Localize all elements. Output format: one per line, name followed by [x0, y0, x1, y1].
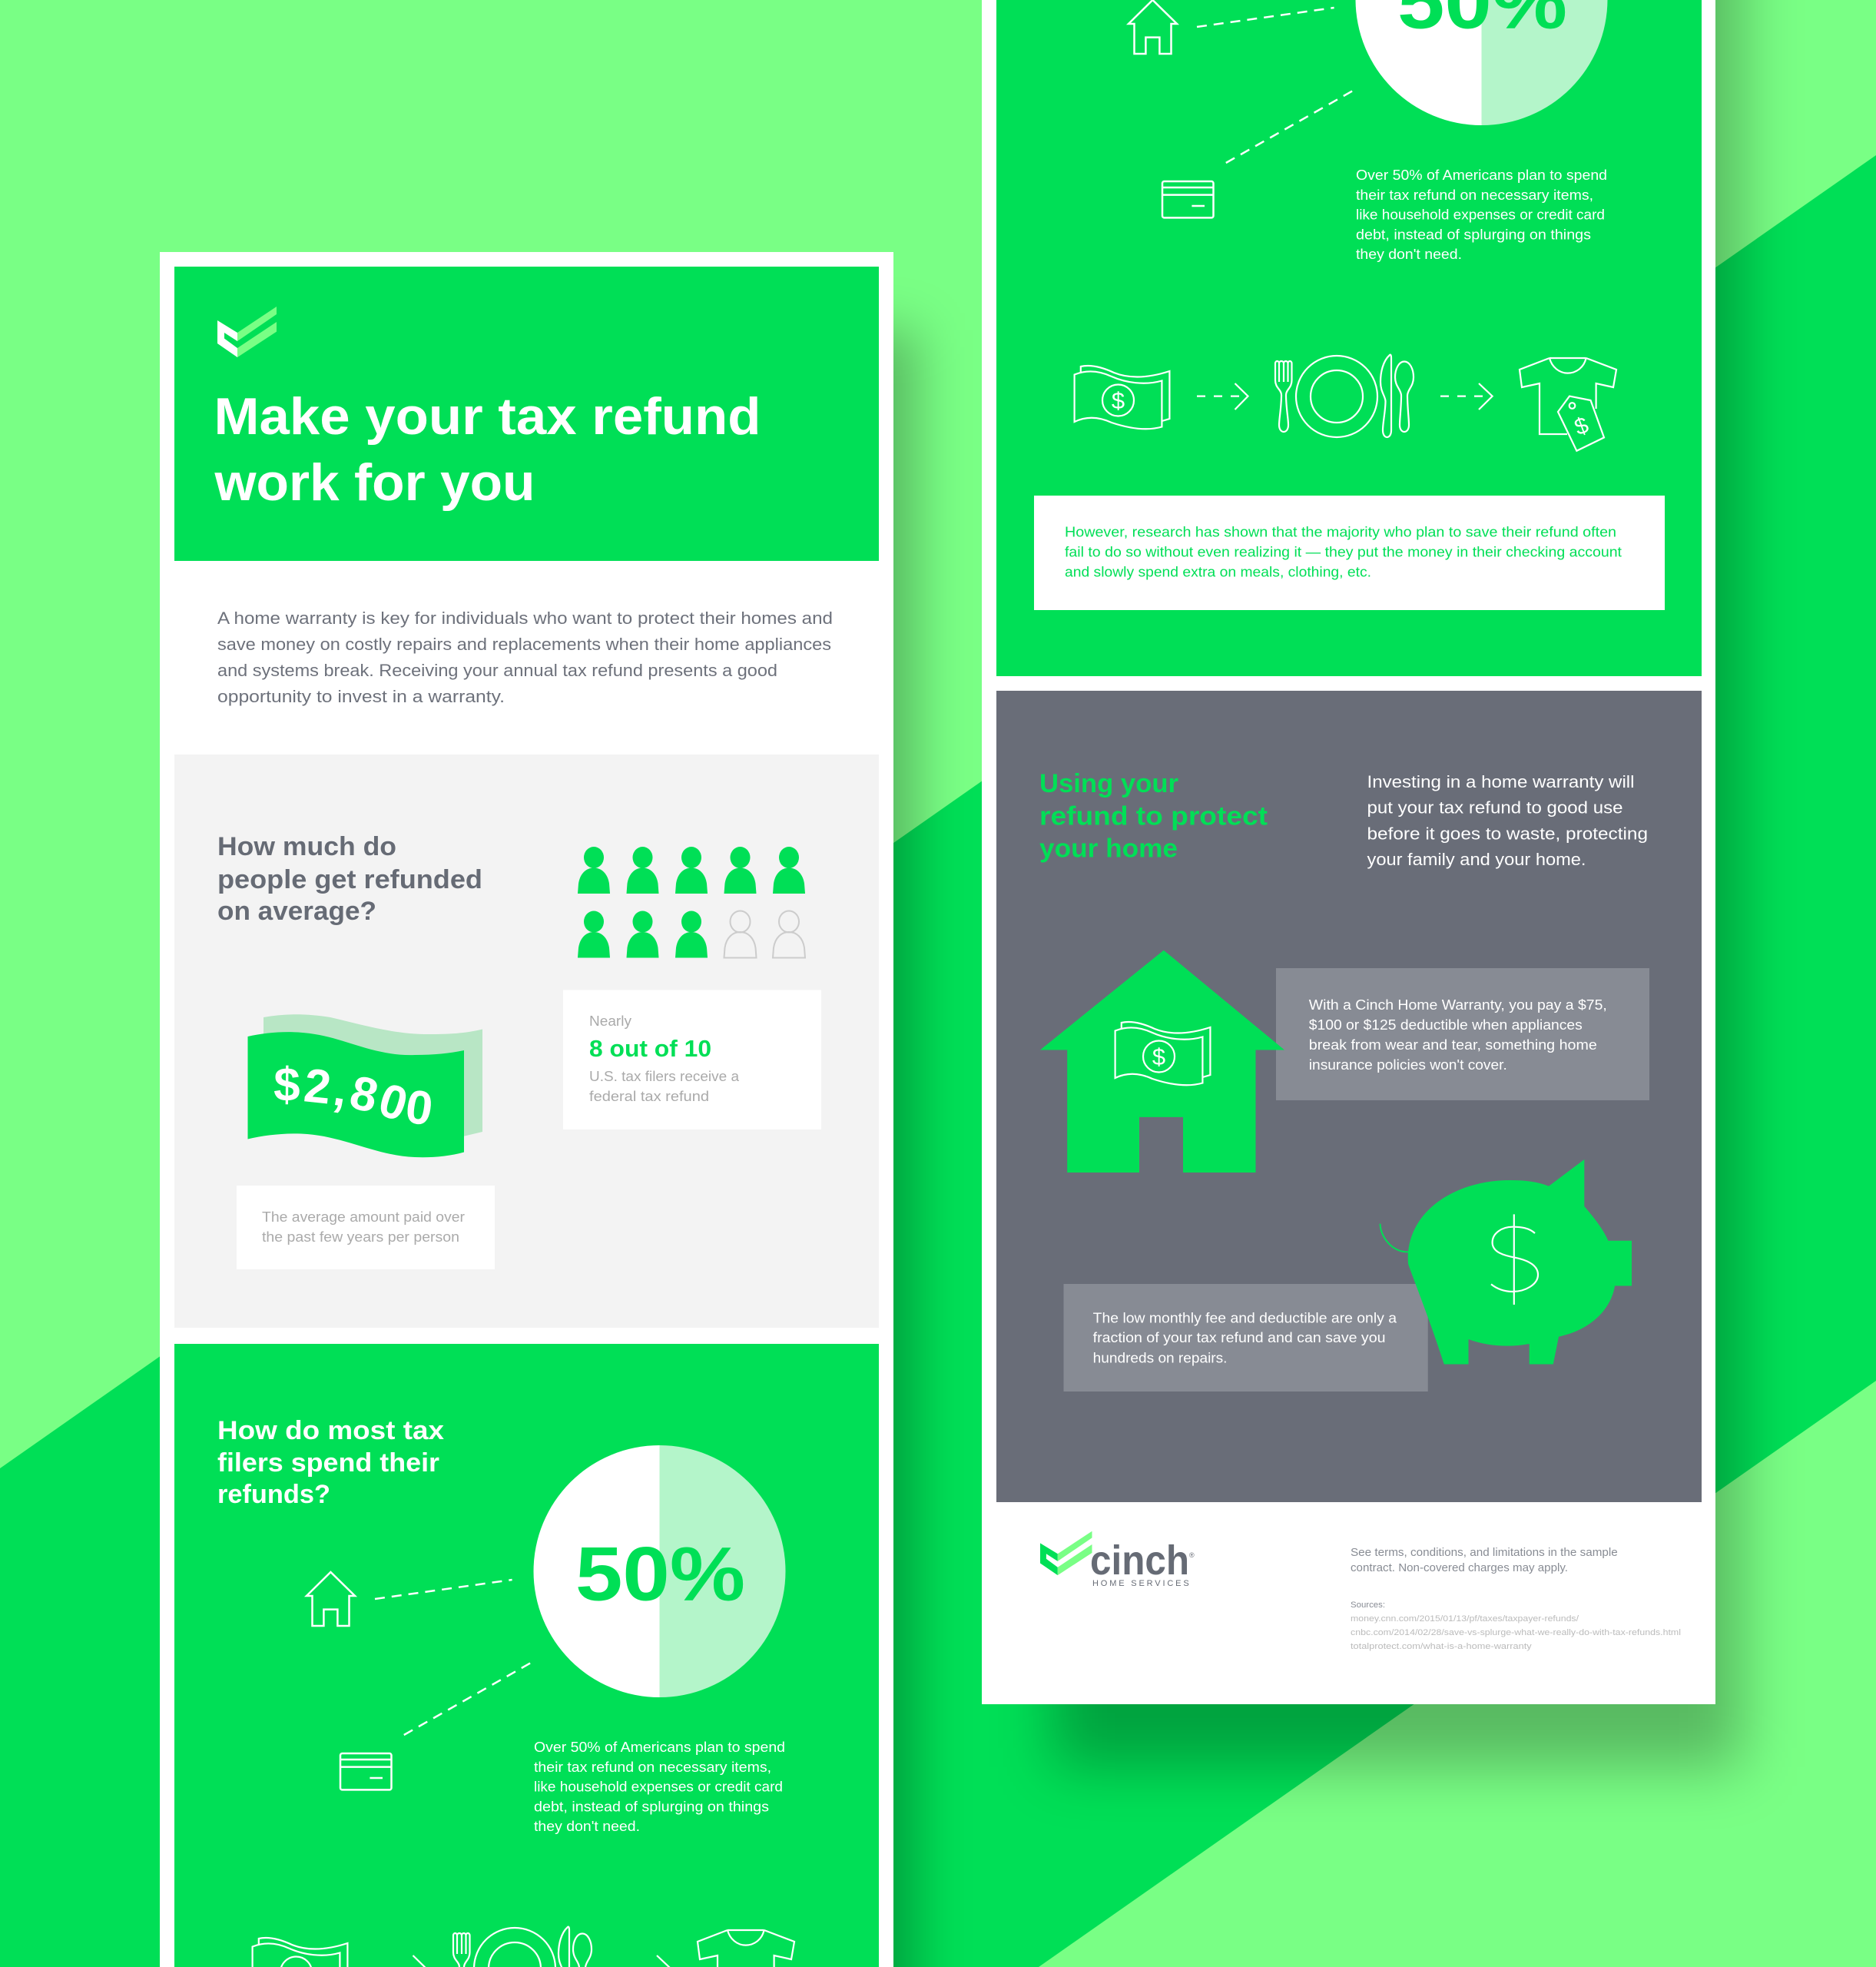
heading: how do most: refunds? — [217, 1480, 330, 1509]
logo: cinch home services: cinch — [1090, 1537, 1189, 1584]
icon: house with money — [1040, 950, 1284, 1173]
text block: introduction: save money on costly repairs and replacements when their home appliances — [217, 635, 831, 654]
icon: credit card — [340, 1753, 392, 1790]
callout: deductible: With a Cinch Home Warranty, you pay a $75, — [1309, 997, 1607, 1013]
callout: however: fail to do so without even realizing it — they put the money in their checking account — [1065, 544, 1622, 559]
text block: sources: money.cnn.com/2015/01/13/pf/taxes/taxpayer-refunds/ — [1351, 1614, 1579, 1624]
text block: introduction: A home warranty is key for individuals who want to protect their homes and — [217, 609, 833, 628]
callout: deductible — [1276, 968, 1649, 1100]
pictogram: 8 of 10 people — [578, 847, 805, 957]
arrow: meal to shirt — [1440, 383, 1493, 410]
logo: cinch home services — [1040, 1531, 1195, 1588]
heading: how do most: How do most tax — [217, 1416, 444, 1445]
callout: low monthly fee: The low monthly fee and deductible are only a — [1093, 1310, 1397, 1326]
footer — [1040, 1531, 1681, 1651]
icon: check logo — [217, 307, 277, 357]
title: work for you — [214, 453, 535, 512]
panel: right card — [982, 0, 1715, 1704]
panel: spending (right card) — [996, 0, 1702, 676]
text block: over 50%: their tax refund on necessary items, — [1356, 187, 1593, 203]
text block: sources: Sources: — [1351, 1600, 1385, 1610]
icon: house outline — [307, 1572, 355, 1626]
text block: over 50% — [1356, 167, 1607, 262]
connector: card to pie — [404, 1661, 535, 1735]
callout: 8 out of 10: 8 out of 10 — [589, 1035, 711, 1062]
logo: cinch home services: ® — [1189, 1551, 1195, 1559]
text block: sources: cnbc.com/2014/02/28/save-vs-splurge-what-we-really-do-with-tax-refunds.html — [1351, 1628, 1681, 1637]
callout: however: and slowly spend extra on meals, clothing, etc. — [1065, 564, 1371, 579]
arrow: money to meal — [1197, 383, 1248, 410]
text block: investing: Investing in a home warranty will — [1367, 772, 1635, 791]
icon: money: $ — [1112, 387, 1125, 414]
logo: cinch home services: HOME SERVICES — [1092, 1579, 1189, 1588]
heading: how much — [217, 832, 482, 926]
text block: over 50%: they don't need. — [1356, 246, 1462, 262]
callout: average amount: the past few years per person — [262, 1229, 459, 1245]
heading: how do most: filers spend their — [217, 1448, 439, 1478]
callout: 8 out of 10: Nearly — [589, 1013, 631, 1029]
icon: shirt with price tag: $ — [1571, 413, 1593, 440]
chart: 50% pie — [533, 1445, 785, 1697]
callout: average amount: The average amount paid over — [262, 1209, 465, 1225]
icon: banknote with amount: $2,800 — [274, 1065, 431, 1125]
text block: terms — [1351, 1547, 1618, 1574]
heading: how do most — [217, 1416, 444, 1509]
icon: house outline — [1129, 0, 1177, 54]
callout: average amount — [237, 1186, 495, 1269]
callout: low monthly fee: fraction of your tax refund and can save you — [1093, 1329, 1386, 1345]
text block: over 50%: debt, instead of splurging on things — [1356, 227, 1591, 243]
heading: using your refund: your home — [1039, 834, 1178, 864]
heading: using your refund: Using your — [1039, 769, 1178, 798]
icon row: money, meal, shirt (cropped) — [253, 1927, 794, 1967]
heading: how much: people get refunded — [217, 865, 482, 894]
shadow: right card — [1052, 0, 1742, 1767]
icon: plate and cutlery — [1275, 355, 1414, 437]
text block: over 50%: Over 50% of Americans plan to spend — [534, 1739, 785, 1755]
text block: over 50% — [534, 1739, 785, 1834]
callout: low monthly fee: hundreds on repairs. — [1093, 1349, 1228, 1366]
text block: sources: totalprotect.com/what-is-a-home-warranty — [1351, 1642, 1532, 1651]
callout: low monthly fee — [1063, 1284, 1428, 1391]
panel: protect your home — [996, 691, 1702, 1502]
callout: 8 out of 10 — [563, 990, 821, 1129]
text block: over 50%: their tax refund on necessary items, — [534, 1759, 771, 1775]
panel: average refund — [174, 755, 879, 1328]
text block: over 50%: Over 50% of Americans plan to spend — [1356, 167, 1607, 183]
callout: deductible: $100 or $125 deductible when appliances — [1309, 1017, 1583, 1033]
text block: terms: See terms, conditions, and limitations in the sample — [1351, 1547, 1618, 1559]
text block: sources — [1351, 1600, 1681, 1651]
icon: banknote with amount — [247, 1014, 482, 1157]
callout: however — [1034, 496, 1665, 610]
heading: using your refund: refund to protect — [1039, 802, 1268, 831]
text block: investing: put your tax refund to good use — [1367, 798, 1622, 818]
text block: investing: before it goes to waste, protecting — [1367, 824, 1648, 844]
text block: introduction: and systems break. Receiving your annual tax refund presents a good — [217, 661, 777, 680]
title: Make your tax refund — [214, 387, 761, 446]
text block: over 50%: like household expenses or credit card — [1356, 206, 1605, 223]
heading: using your refund — [1039, 769, 1268, 864]
text block: over 50%: like household expenses or credit card — [534, 1778, 783, 1795]
shadow: left card — [230, 330, 917, 1967]
title — [214, 387, 761, 512]
text block: over 50%: debt, instead of splurging on things — [534, 1799, 769, 1815]
panel: spending (left card) — [174, 1344, 879, 1967]
callout: 8 out of 10: U.S. tax filers receive a — [589, 1069, 740, 1084]
icon: house with money: $ — [1152, 1043, 1165, 1070]
callout: deductible: break from wear and tear, something home — [1309, 1037, 1597, 1053]
text block: introduction — [217, 609, 833, 706]
panel: header — [174, 267, 879, 561]
connector: card to pie — [1226, 89, 1357, 163]
chart: 50% pie: 50% — [575, 1531, 745, 1617]
icon: credit card — [1162, 181, 1214, 217]
text block: introduction: opportunity to invest in a warranty. — [217, 687, 505, 706]
text block: terms: contract. Non-covered charges may apply. — [1351, 1562, 1568, 1574]
text block: investing — [1367, 772, 1648, 869]
icon: shirt with price tag — [1520, 358, 1616, 451]
icon: money — [1075, 366, 1169, 429]
connector: house to pie — [375, 1580, 512, 1599]
heading: how much: on average? — [217, 897, 376, 926]
callout: deductible: insurance policies won't cover. — [1309, 1056, 1507, 1073]
connector: house to pie — [1197, 8, 1334, 27]
heading: how much: How much do — [217, 832, 396, 861]
text block: over 50%: they don't need. — [534, 1818, 640, 1834]
callout: 8 out of 10: federal tax refund — [589, 1089, 709, 1104]
text block: investing: your family and your home. — [1367, 850, 1586, 869]
panel: left card — [160, 252, 893, 1967]
icon: piggy bank — [1380, 1159, 1632, 1365]
chart: 50% pie (continued) — [1355, 0, 1607, 125]
callout: however: However, research has shown that the majority who plan to save their refund often — [1065, 524, 1616, 539]
